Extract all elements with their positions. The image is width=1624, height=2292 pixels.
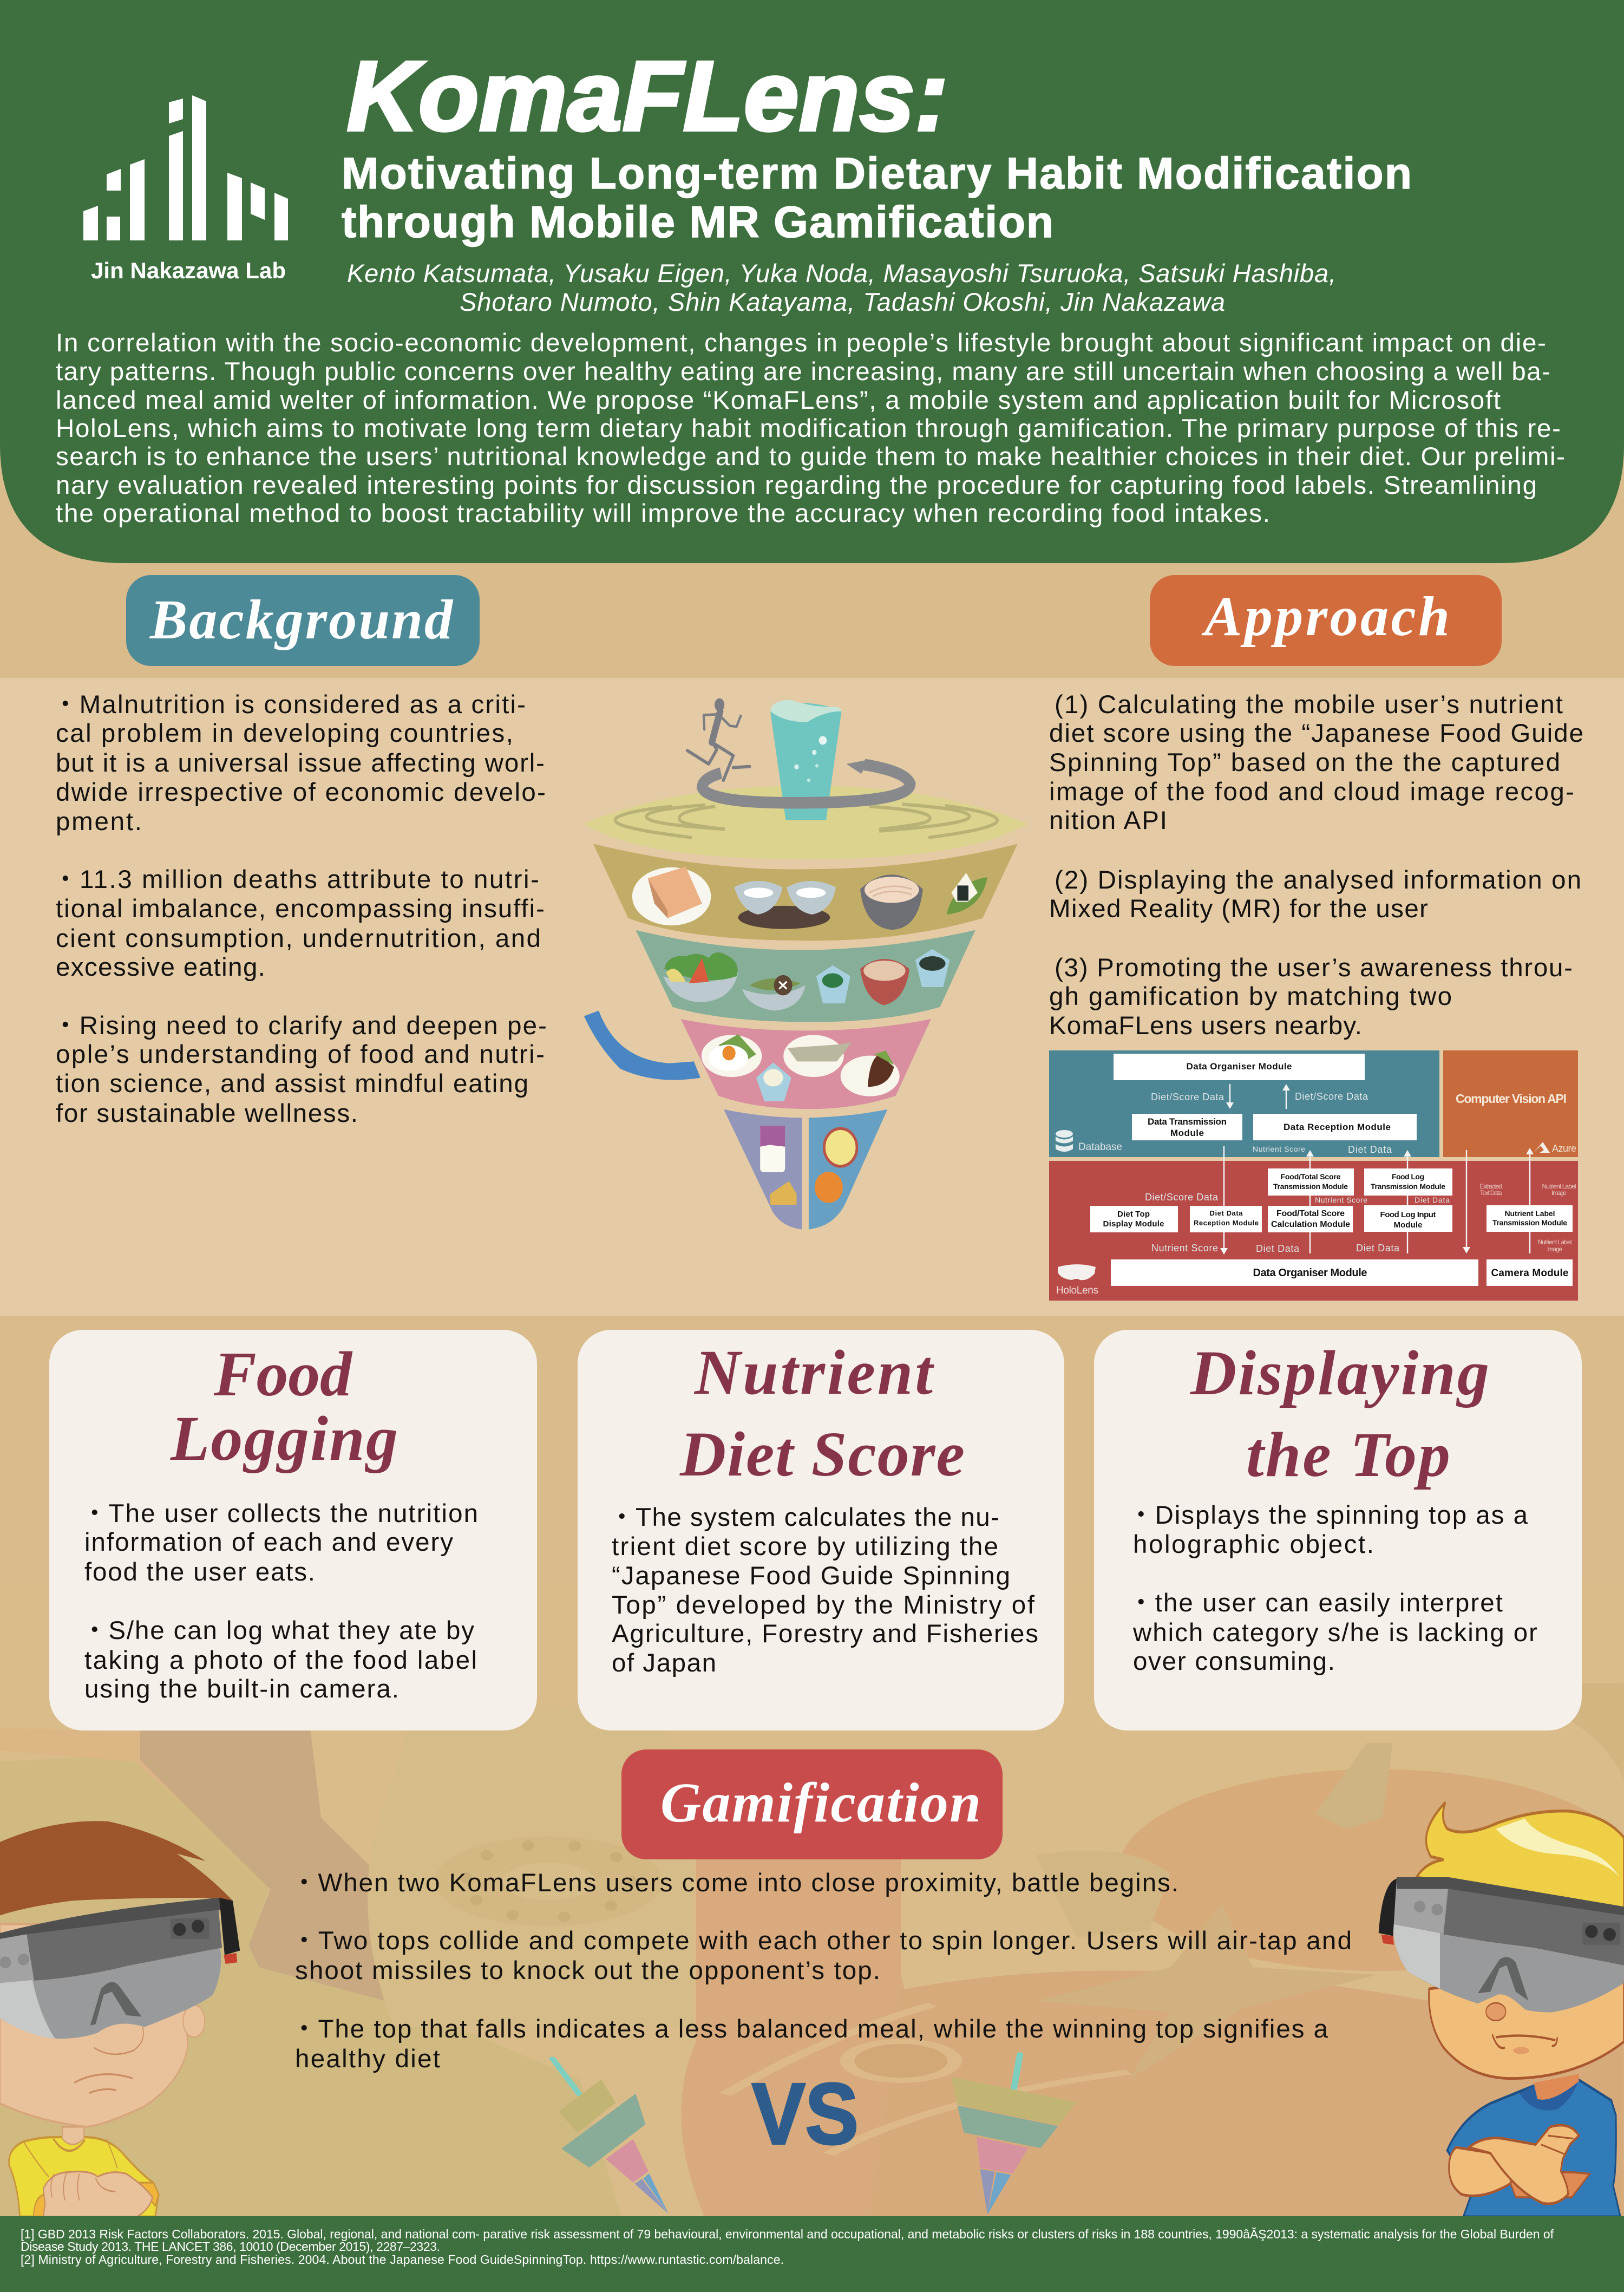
text: approach list <box>1049 690 1583 1040</box>
module labels: Diet Top <box>1117 1210 1150 1219</box>
panel: hololens <box>1049 1161 1578 1301</box>
heading: Approach: Approach <box>1201 585 1450 648</box>
module labels: Nutrient Label <box>1505 1209 1555 1218</box>
head <box>1429 1965 1624 2079</box>
headset <box>1393 1880 1624 2012</box>
abstract: nary evaluation revealed interesting points for discussion regarding the procedure for capturing food labels. Streamlining <box>56 471 1537 500</box>
data flow labels: Diet Data <box>1348 1144 1392 1155</box>
panel: database <box>1049 1050 1439 1157</box>
abstract: the operational method to boost tractability will improve the accuracy when recording food intakes. <box>56 499 1270 528</box>
panel: nutrient diet score: trient diet score by utilizing the <box>612 1532 998 1561</box>
text: gamification bullets: ・The top that falls indicates a less balanced meal, while the winning top signifies a <box>291 2015 1328 2043</box>
abstract: HoloLens, which aims to motivate long term dietary habit modification through gamification. The primary purpose of this re- <box>56 414 1561 443</box>
text: background bullets: ・Malnutrition is considered as a criti- <box>53 690 526 719</box>
text: approach list: (1) Calculating the mobile user’s nutrient <box>1055 690 1563 719</box>
data flow labels: Extracted <box>1480 1183 1502 1190</box>
icon: glass of water <box>770 703 841 820</box>
data flow labels: Diet/Score Data <box>1151 1092 1224 1102</box>
module labels: Reception Module <box>1194 1219 1259 1227</box>
panel: displaying the top: the Top <box>1246 1419 1450 1490</box>
module labels: Food Log <box>1392 1172 1424 1181</box>
module labels: Transmission Module <box>1371 1182 1445 1191</box>
text: gamification bullets: ・When two KomaFLens users come into close proximity, battle begins. <box>291 1869 1178 1897</box>
title: KomaFLens: <box>347 41 948 151</box>
panel: displaying the top <box>1094 1330 1582 1731</box>
panel: nutrient diet score: ・The system calculates the nu- <box>609 1503 999 1532</box>
headset <box>0 1942 221 2039</box>
icon: running figure <box>687 698 750 780</box>
text: background bullets: ・Rising need to clarify and deepen pe- <box>53 1011 547 1040</box>
hair <box>1417 1803 1624 1912</box>
icon: falling spinning top <box>552 2059 669 2213</box>
data flow labels: Nutrient Score <box>1151 1243 1218 1253</box>
panel: displaying the top: which category s/he is lacking or <box>1132 1618 1537 1647</box>
panel: displaying the top: over consuming. <box>1133 1647 1335 1676</box>
data flow labels: Diet Data <box>1256 1243 1300 1254</box>
data flow labels: Nutrient Score <box>1253 1145 1305 1153</box>
module labels: Food Log Input <box>1380 1210 1436 1219</box>
panel: nutrient diet score: Nutrient <box>693 1337 934 1408</box>
arms <box>34 2195 58 2217</box>
abstract <box>56 329 1565 528</box>
azure logo: Azure <box>1552 1143 1576 1154</box>
data flow labels: Image <box>1551 1189 1567 1197</box>
heading: Approach <box>1150 575 1502 666</box>
panel: food logging: using the built-in camera. <box>84 1675 399 1703</box>
modules <box>1090 1054 1573 1286</box>
text: gamification bullets <box>291 1869 1352 2073</box>
subtitle <box>342 149 1412 247</box>
tier: vegetables <box>636 930 975 1022</box>
text: gamification bullets: healthy diet <box>295 2045 440 2073</box>
text: background bullets: ople’s understanding of food and nutri- <box>56 1040 545 1069</box>
background: faded fruit watermark <box>0 1582 1624 2218</box>
text: background bullets: for sustainable wellness. <box>56 1099 358 1128</box>
text: background bullets: tion science, and assist mindful eating <box>56 1069 528 1098</box>
tier: fruit <box>809 1109 887 1230</box>
vs label: VS <box>752 2065 859 2162</box>
icon: upright spinning top <box>951 2054 1077 2215</box>
text: approach list: Spinning Top” based on the the captured <box>1049 748 1560 777</box>
text: background bullets: cal problem in developing countries, <box>56 719 513 748</box>
system architecture diagram <box>1049 1050 1578 1301</box>
tier: milk <box>724 1109 802 1230</box>
data flow labels <box>1145 1091 1576 1254</box>
hair <box>0 1821 233 1915</box>
footer: references: [1] GBD 2013 Risk Factors Collaborators. 2015. Global, regional, and national com- parative risk assessment of 79 behavioural, environmental and occupational, and metabolic risks or clusters of risks in 188 countries, 1990âĂŞ2013: a systematic analysis for the Global Burden of <box>21 2227 1554 2241</box>
module labels: Data Organiser Module <box>1253 1267 1367 1279</box>
footer: references: [2] Ministry of Agriculture, Forestry and Fisheries. 2004. About the Japanese Food GuideSpinningTop. https://www.runtastic.com/balance. <box>21 2252 784 2267</box>
text: gamification bullets: shoot missiles to knock out the opponent’s top. <box>295 1956 880 1985</box>
header panel <box>0 0 1624 563</box>
text: background bullets: excessive eating. <box>56 953 265 982</box>
icon: hololens: HoloLens <box>1056 1285 1098 1296</box>
footer: references <box>0 2216 1624 2292</box>
text: approach list: nition API <box>1049 806 1167 835</box>
authors: Shotaro Numoto, Shin Katayama, Tadashi Okoshi, Jin Nakazawa <box>460 288 1225 316</box>
text: approach list: gh gamification by matching two <box>1049 982 1452 1011</box>
tier: water and tea disc <box>584 786 1027 859</box>
text: approach list: KomaFLens users nearby. <box>1049 1011 1362 1040</box>
panel: food logging: Food <box>213 1338 353 1409</box>
text: approach list: diet score using the “Japanese Food Guide <box>1049 719 1583 748</box>
character: boy with blond hair and headset <box>1379 1803 1624 2217</box>
shirt <box>1447 2080 1620 2217</box>
text: background bullets: dwide irrespective of economic develo- <box>56 778 546 807</box>
text: approach list: (2) Displaying the analysed information on <box>1055 866 1581 894</box>
heading: Background: Background <box>149 589 454 651</box>
module labels: Display Module <box>1103 1219 1164 1229</box>
data flow labels: Image <box>1547 1245 1562 1253</box>
tier: fish and meat <box>681 1019 931 1109</box>
text: background bullets: pment. <box>56 807 142 836</box>
heading: gamification <box>621 1749 1003 1859</box>
panel: nutrient diet score <box>578 1330 1064 1731</box>
panel: food logging: ・The user collects the nutrition <box>82 1499 478 1528</box>
character: boy with brown hair and headset <box>0 1821 240 2217</box>
subtitle: Motivating Long-term Dietary Habit Modification <box>342 149 1412 198</box>
panel: food logging: taking a photo of the food label <box>84 1646 477 1675</box>
panel: displaying the top: Displaying <box>1190 1337 1489 1408</box>
icon: database <box>1056 1130 1073 1152</box>
module labels: Data Reception Module <box>1284 1122 1391 1132</box>
api label: Computer Vision API <box>1456 1092 1567 1106</box>
data flow labels: Diet Data <box>1356 1243 1400 1253</box>
text: background bullets: but it is a universal issue affecting worl- <box>56 749 545 778</box>
data flow labels: Diet Data <box>1415 1196 1450 1204</box>
data flow labels: Nutrient Label <box>1542 1183 1576 1190</box>
module labels <box>1103 1061 1569 1279</box>
icon: blue ribbon handle <box>584 1011 700 1080</box>
head <box>0 1924 188 2127</box>
module labels: Transmission Module <box>1492 1218 1567 1227</box>
illustration: Japanese Food Guide spinning top <box>584 698 1027 1230</box>
abstract: search is to enhance the users’ nutritional knowledge and to guide them to make healthier choices in their diet. Our prelimi- <box>56 442 1565 471</box>
abstract: In correlation with the socio-economic development, changes in people’s lifestyle brought about significant impact on die- <box>56 329 1546 357</box>
text: approach list: (3) Promoting the user’s awareness throu- <box>1055 954 1573 982</box>
panel: food logging: food the user eats. <box>84 1558 315 1586</box>
text: background bullets <box>53 690 547 1128</box>
module labels: Module <box>1170 1128 1204 1138</box>
panel: food logging <box>49 1330 537 1731</box>
panel: food logging: ・S/he can log what they ate by <box>82 1616 474 1645</box>
panel: displaying the top: holographic object. <box>1133 1530 1374 1559</box>
module labels: Food/Total Score <box>1276 1209 1345 1218</box>
panel: displaying the top: ・the user can easily interpret <box>1128 1589 1503 1617</box>
data flow labels: Text Data <box>1480 1189 1502 1197</box>
arms <box>1449 2147 1512 2196</box>
shirt <box>9 2137 159 2217</box>
tier: grains <box>593 844 1018 941</box>
abstract: tary patterns. Though public concerns over healthy eating are increasing, many are still uncertain when choosing a well ba- <box>56 357 1550 386</box>
logo: Jin Nakazawa Lab: Jin Nakazawa Lab <box>91 258 286 283</box>
authors: Kento Katsumata, Yusaku Eigen, Yuka Noda, Masayoshi Tsuruoka, Satsuki Hashiba, <box>347 259 1336 288</box>
panel: nutrient diet score: Top” developed by the Ministry of <box>612 1591 1035 1620</box>
abstract: lanced meal amid welter of information. We propose “KomaFLens”, a mobile system and application built for Microsoft <box>56 386 1501 415</box>
heading: Background <box>126 575 480 666</box>
icon: hololens <box>1056 1264 1098 1296</box>
arrows <box>1224 1084 1530 1253</box>
text: approach list: image of the food and cloud image recog- <box>1049 778 1574 806</box>
panel: food logging: information of each and every <box>84 1528 453 1557</box>
footer: references: Disease Study 2013. THE LANCET 386, 10010 (December 2015), 2287–2323. <box>21 2239 440 2254</box>
icon: rotation arrow <box>702 765 911 803</box>
module labels: Diet Data <box>1209 1209 1243 1217</box>
panel: computer vision api <box>1443 1050 1578 1157</box>
module labels: Food/Total Score <box>1281 1172 1341 1181</box>
data flow labels: Diet/Score Data <box>1145 1192 1219 1203</box>
text: approach list: Mixed Reality (MR) for the user <box>1049 894 1428 923</box>
panel: nutrient diet score: “Japanese Food Guide Spinning <box>612 1562 1010 1590</box>
database label: Database <box>1078 1141 1122 1153</box>
data flow labels: Nutrient Score <box>1315 1196 1367 1204</box>
data flow labels: Diet/Score Data <box>1295 1091 1368 1102</box>
panel: food logging: Logging <box>170 1403 398 1474</box>
panel: nutrient diet score: of Japan <box>612 1649 716 1677</box>
module labels: Calculation Module <box>1271 1220 1350 1229</box>
module labels: Data Transmission <box>1148 1116 1227 1127</box>
light middle band <box>0 678 1624 1316</box>
text: gamification bullets: ・Two tops collide and compete with each other to spin longer. Users will air-tap and <box>291 1927 1352 1955</box>
azure logo <box>1534 1142 1576 1154</box>
subtitle: through Mobile MR Gamification <box>342 198 1053 247</box>
module labels: Camera Module <box>1491 1268 1569 1279</box>
text: background bullets: ・11.3 million deaths attribute to nutri- <box>53 865 539 894</box>
panel: nutrient diet score: Diet Score <box>679 1419 965 1490</box>
authors <box>347 259 1336 316</box>
logo: Jin Nakazawa Lab <box>83 95 288 283</box>
text: background bullets: cient consumption, undernutrition, and <box>56 924 541 953</box>
panel: displaying the top: ・Displays the spinning top as a <box>1128 1501 1528 1530</box>
module labels: Data Organiser Module <box>1187 1061 1292 1072</box>
data flow labels: Nutrient Label <box>1537 1238 1572 1246</box>
text: background bullets: tional imbalance, encompassing insuffi- <box>56 894 545 923</box>
module labels: Module <box>1393 1220 1423 1230</box>
heading: gamification: Gamification <box>660 1772 981 1834</box>
module labels: Transmission Module <box>1273 1182 1348 1191</box>
panel: nutrient diet score: Agriculture, Forestry and Fisheries <box>612 1620 1038 1648</box>
